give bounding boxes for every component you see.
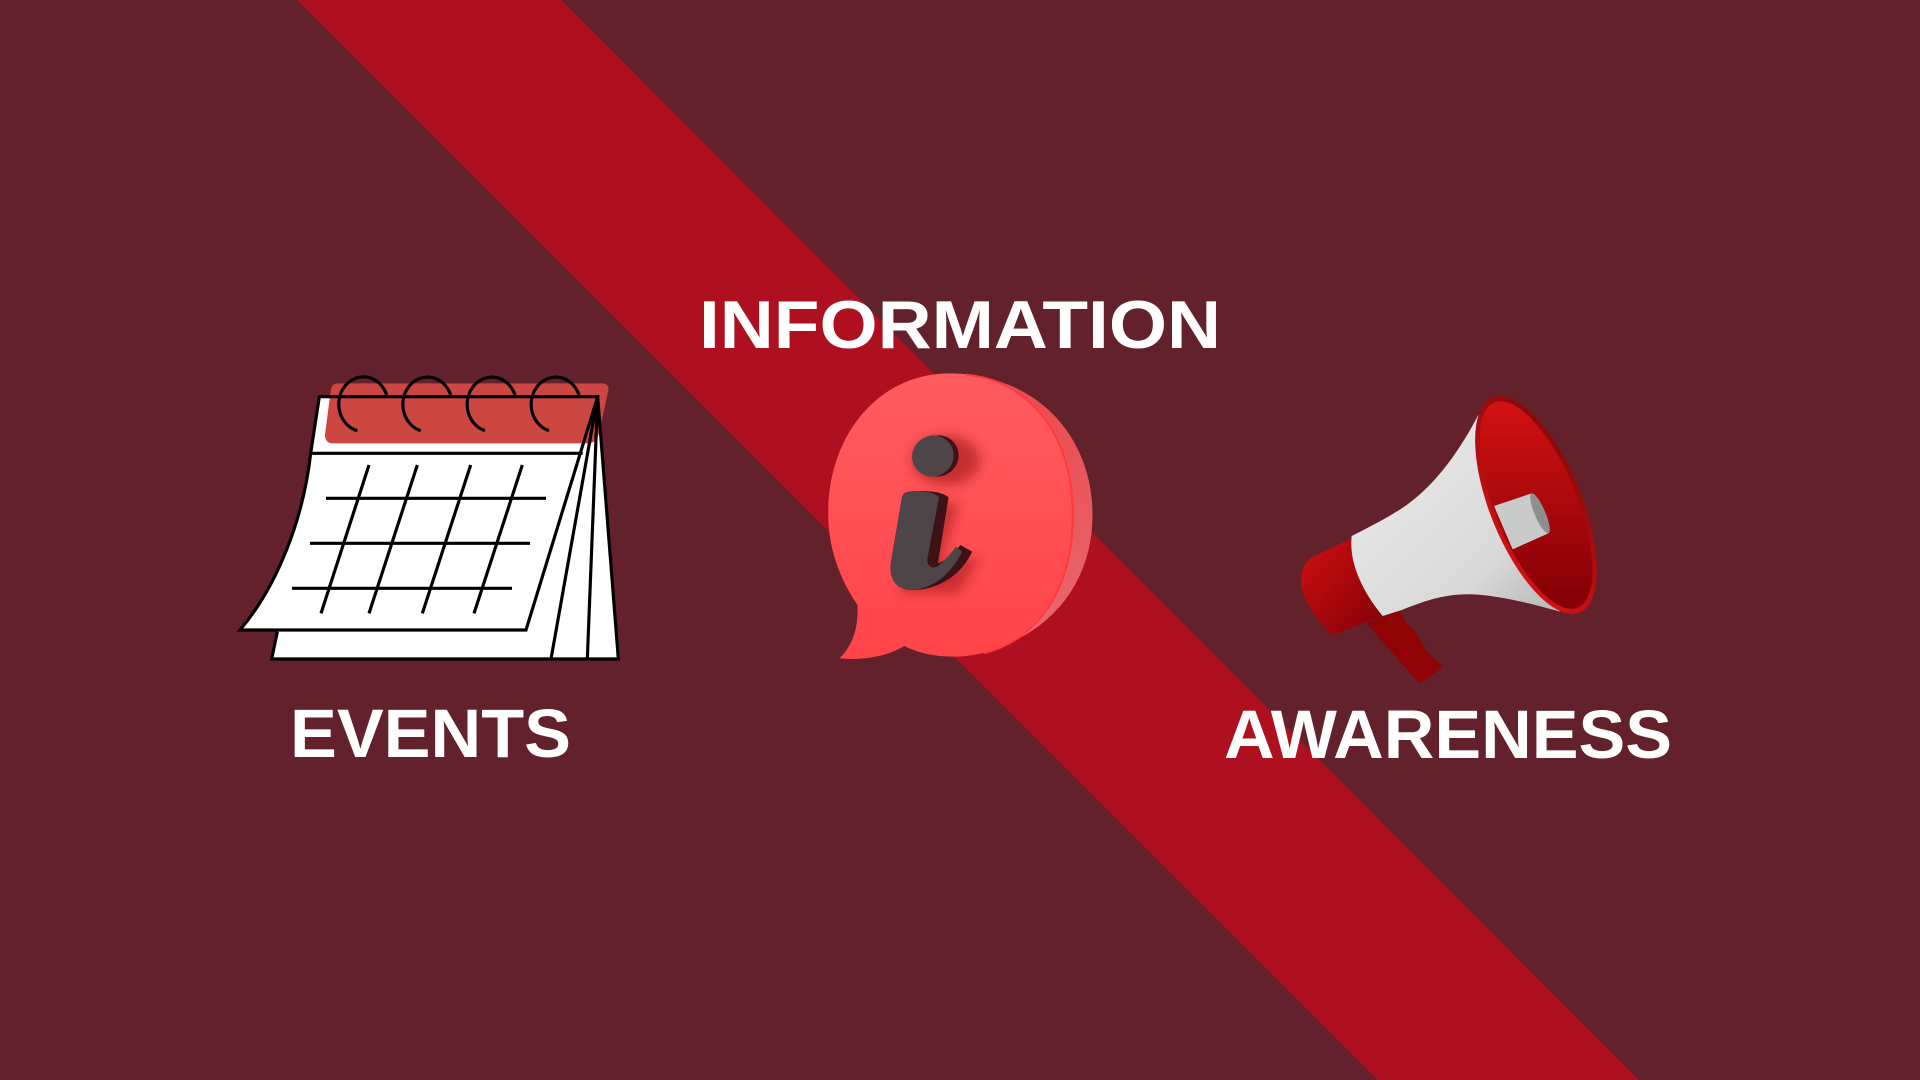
- icon: megaphone: [1301, 380, 1622, 683]
- heading: information: INFORMATION: [699, 287, 1221, 363]
- megaphone mouth: [1450, 380, 1622, 630]
- megaphone insert: [1494, 493, 1548, 549]
- icon: calendar: [240, 377, 618, 659]
- megaphone rear grip: [1301, 538, 1383, 635]
- diagonal band: [297, 0, 1639, 1080]
- heading: events: EVENTS: [290, 695, 571, 772]
- megaphone handle: [1367, 610, 1443, 683]
- icon: information speech bubble: [828, 373, 1092, 659]
- heading: awareness: AWARENESS: [1224, 696, 1672, 773]
- megaphone cone: [1351, 415, 1560, 616]
